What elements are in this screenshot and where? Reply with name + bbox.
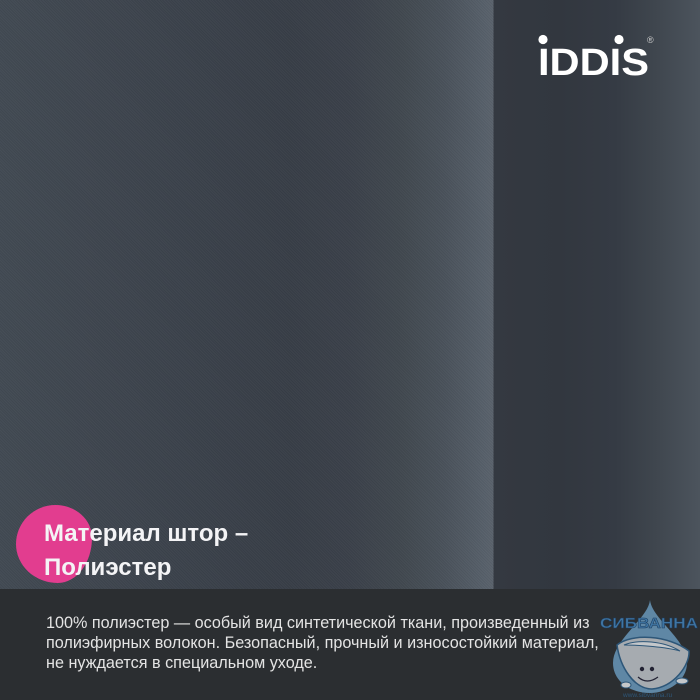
fabric weave texture xyxy=(0,0,494,589)
heading xyxy=(44,520,248,580)
icon: IDDIS logo: ® xyxy=(647,35,654,45)
icon: pink circle accent xyxy=(16,505,92,583)
text block: description xyxy=(46,614,599,672)
icon: Sibvanna watermark xyxy=(600,600,699,699)
panel: description band xyxy=(0,589,700,700)
text block: description: не нуждается в специальном уходе. xyxy=(46,654,317,672)
heading: Полиэстер xyxy=(44,554,171,580)
text block: description: 100% полиэстер — особый вид синтетической ткани, произведенный из xyxy=(46,614,590,632)
icon: Sibvanna watermark: СИБВАННА xyxy=(600,616,699,632)
text block: description: полиэфирных волокон. Безопасный, прочный и износостойкий материал, xyxy=(46,634,599,652)
icon: Sibvanna watermark: www.sibvanna.ru xyxy=(622,692,673,699)
heading: Материал штор – xyxy=(44,520,248,547)
